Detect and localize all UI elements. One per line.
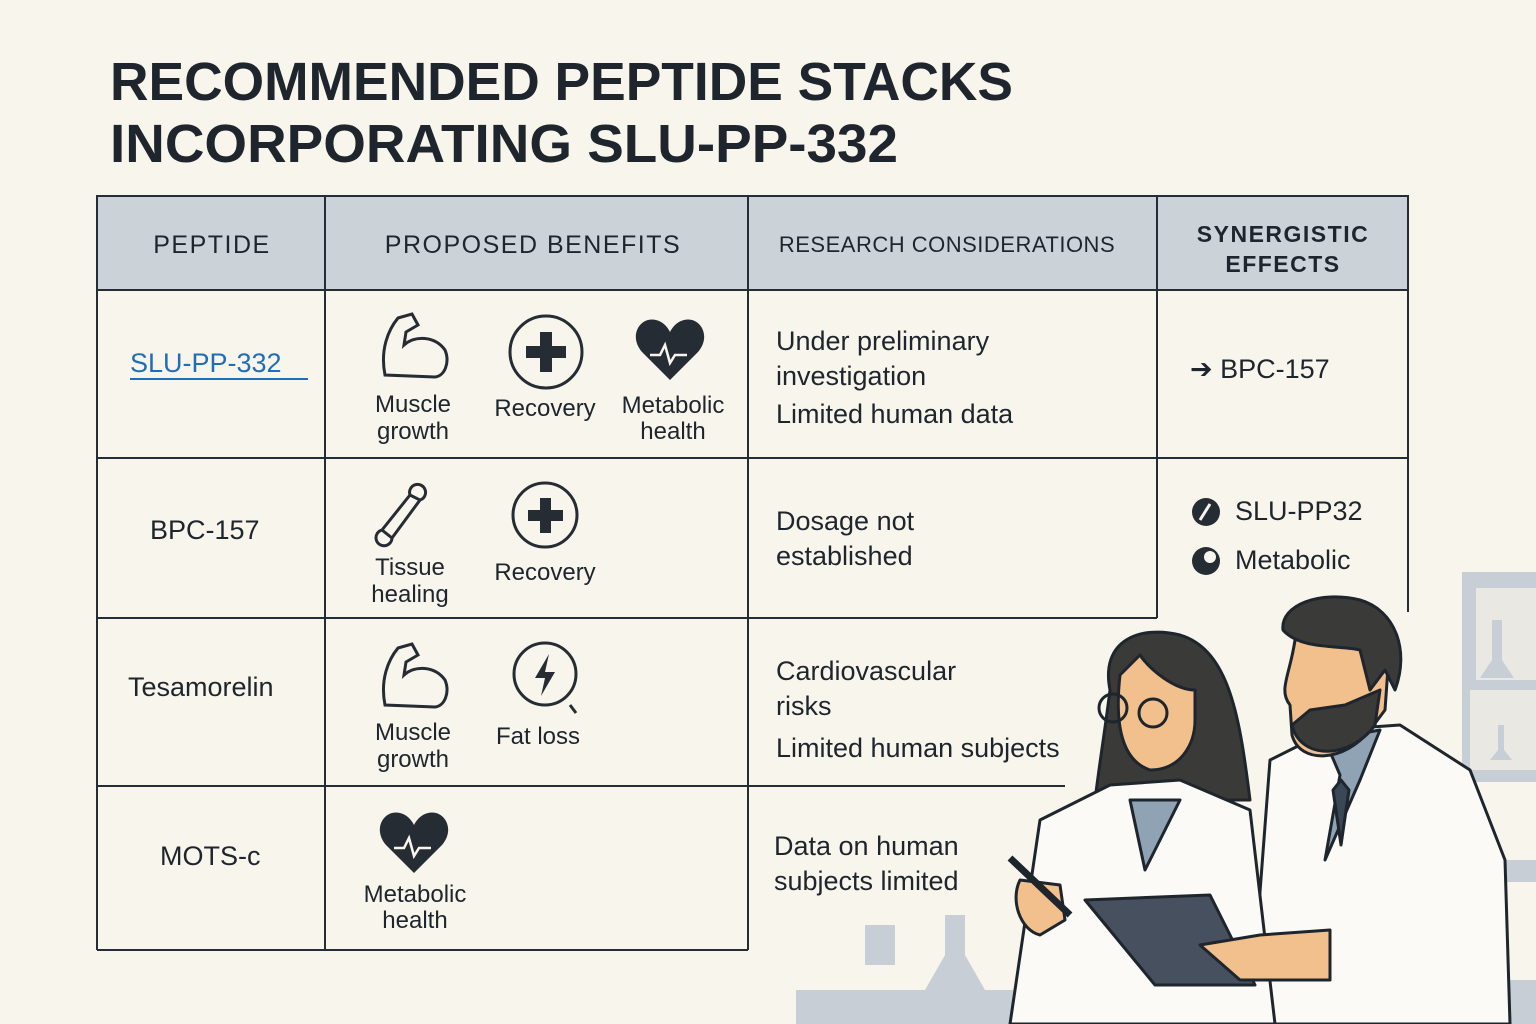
- benefit icons: [364, 314, 724, 934]
- benefit icons: Muscle: [375, 719, 451, 746]
- row: Tesamorelin: risks: [776, 691, 832, 721]
- clipboard: [1085, 895, 1255, 985]
- row: SLU-PP-332: Limited human data: [776, 399, 1014, 429]
- title: [110, 52, 1013, 174]
- row: SLU-PP-332: SLU-PP-332: [130, 348, 282, 378]
- row: Tesamorelin: Limited human subjects: [776, 733, 1060, 763]
- benefit icons: Recovery: [494, 559, 596, 586]
- row: BPC-157: [150, 496, 1363, 575]
- benefit icons: Tissue: [375, 554, 445, 581]
- row: Tesamorelin: Cardiovascular: [776, 656, 956, 686]
- row: SLU-PP-332: investigation: [776, 361, 926, 391]
- benefit icons: growth: [377, 746, 449, 773]
- table: [97, 196, 1408, 950]
- benefit icons: Recovery: [494, 395, 596, 422]
- illustration: two scientists: [1010, 597, 1510, 1024]
- benefit icons: health: [382, 907, 448, 934]
- woman: [1095, 632, 1250, 800]
- benefit icons: Metabolic: [364, 881, 466, 908]
- row: Tesamorelin: [128, 656, 1060, 763]
- row: BPC-157: BPC-157: [150, 515, 260, 545]
- table header: [97, 196, 1408, 290]
- benefit icons: growth: [377, 418, 449, 445]
- table header: EFFECTS: [1225, 251, 1341, 277]
- table header: PEPTIDE: [153, 231, 271, 259]
- row: BPC-157: Dosage not: [776, 506, 915, 536]
- table header: PROPOSED BENEFITS: [385, 231, 681, 259]
- row: MOTS-c: [160, 831, 959, 896]
- row: Tesamorelin: Tesamorelin: [128, 672, 274, 702]
- row: BPC-157: Metabolic: [1235, 545, 1351, 575]
- row: SLU-PP-332: [130, 326, 1330, 429]
- man: [1250, 725, 1510, 1024]
- row: MOTS-c: MOTS-c: [160, 841, 260, 871]
- benefit icons: Metabolic: [622, 392, 724, 419]
- table header: RESEARCH CONSIDERATIONS: [779, 232, 1115, 257]
- title: RECOMMENDED PEPTIDE STACKS: [110, 52, 1013, 112]
- row: BPC-157: SLU-PP32: [1235, 496, 1363, 526]
- row: SLU-PP-332: ➔ BPC-157: [1190, 354, 1330, 384]
- benefit icons: healing: [371, 581, 449, 608]
- title: INCORPORATING SLU-PP-332: [110, 114, 898, 174]
- row: MOTS-c: subjects limited: [774, 866, 959, 896]
- benefit icons: Fat loss: [496, 723, 580, 750]
- background lab shelf: [796, 572, 1536, 1024]
- row: BPC-157: established: [776, 541, 913, 571]
- benefit icons: Muscle: [375, 391, 451, 418]
- row: SLU-PP-332: Under preliminary: [776, 326, 990, 356]
- row: MOTS-c: Data on human: [774, 831, 959, 861]
- benefit icons: health: [640, 418, 706, 445]
- table header: SYNERGISTIC: [1197, 221, 1369, 247]
